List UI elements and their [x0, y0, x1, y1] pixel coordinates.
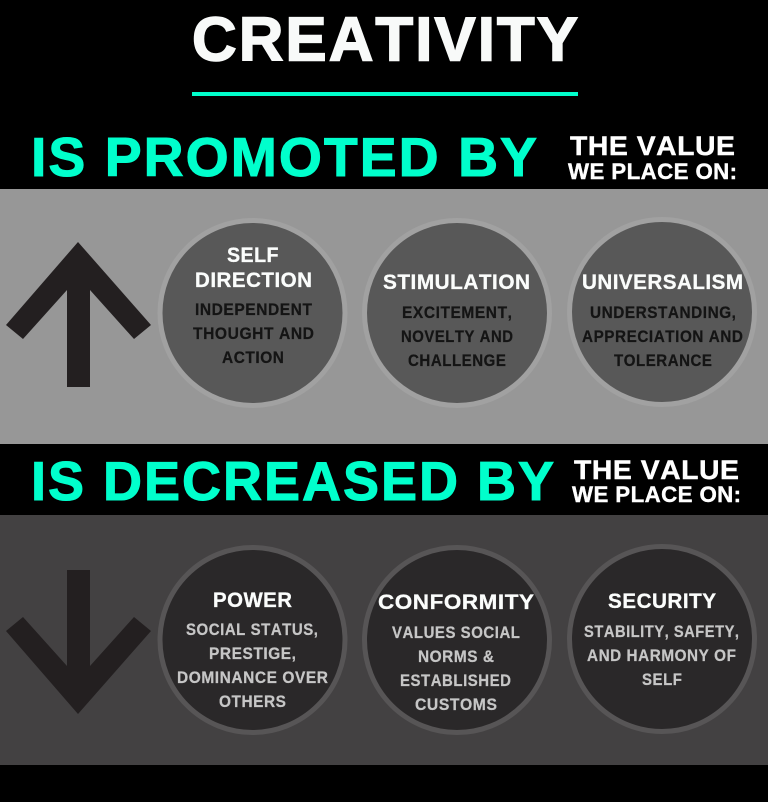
- circle: conformity: NORMS &: [418, 648, 494, 666]
- panel: promoting values: [0, 189, 768, 444]
- title underline: [192, 92, 578, 96]
- circle: conformity: [364, 548, 550, 732]
- circle: conformity: CONFORMITY: [378, 591, 534, 614]
- subheading: the value we place on (promoted): WE PLACE ON:: [568, 159, 738, 184]
- circle: power: SOCIAL STATUS,: [186, 621, 318, 639]
- icon: up arrow: [6, 242, 151, 387]
- subheading: the value we place on (decreased): [572, 455, 742, 507]
- circle: self direction: ACTION: [222, 349, 284, 367]
- circle: stimulation: [364, 220, 550, 406]
- circle: self direction: [160, 220, 345, 406]
- circle: stimulation: EXCITEMENT,: [402, 304, 512, 322]
- circle: self direction: THOUGHT AND: [193, 325, 314, 343]
- circle: power: POWER: [213, 589, 292, 612]
- circle: stimulation: CHALLENGE: [408, 352, 506, 370]
- panel: decreasing values: [0, 515, 768, 765]
- circle: self direction: DIRECTION: [195, 269, 312, 292]
- circle: conformity: CUSTOMS: [415, 696, 498, 714]
- circle: self direction: SELF: [227, 244, 279, 267]
- heading: is decreased by: IS DECREASED BY: [31, 450, 556, 512]
- heading: is promoted by: IS PROMOTED BY: [31, 126, 539, 188]
- title: CREATIVITY: [192, 6, 580, 74]
- circle: security: [570, 546, 754, 732]
- circle: universalism: UNDERSTANDING,: [590, 304, 736, 322]
- circle: power: OTHERS: [219, 693, 286, 711]
- circle: universalism: APPRECIATION AND: [582, 328, 744, 346]
- circle: universalism: [570, 220, 754, 404]
- circle: power: [160, 548, 345, 732]
- subheading: the value we place on (promoted): THE VALUE: [570, 131, 736, 161]
- circle: security: AND HARMONY OF: [587, 647, 736, 665]
- circle: stimulation: NOVELTY AND: [401, 328, 514, 346]
- subheading: the value we place on (decreased): WE PLACE ON:: [572, 482, 742, 507]
- icon: down arrow: [6, 570, 151, 714]
- circle: universalism: TOLERANCE: [614, 352, 712, 370]
- subheading: the value we place on (promoted): [568, 131, 738, 184]
- circle: universalism: UNIVERSALISM: [582, 271, 744, 294]
- subheading: the value we place on (decreased): THE VALUE: [574, 455, 740, 485]
- circle: stimulation: STIMULATION: [383, 271, 530, 294]
- circle: security: SECURITY: [608, 590, 716, 613]
- circle: conformity: ESTABLISHED: [400, 672, 512, 690]
- circle: security: STABILITY, SAFETY,: [584, 623, 740, 641]
- circle: conformity: VALUES SOCIAL: [392, 624, 520, 642]
- circle: self direction: INDEPENDENT: [195, 301, 312, 319]
- circle: power: PRESTIGE,: [209, 645, 296, 663]
- circle: power: DOMINANCE OVER: [177, 669, 328, 687]
- circle: security: SELF: [642, 671, 682, 689]
